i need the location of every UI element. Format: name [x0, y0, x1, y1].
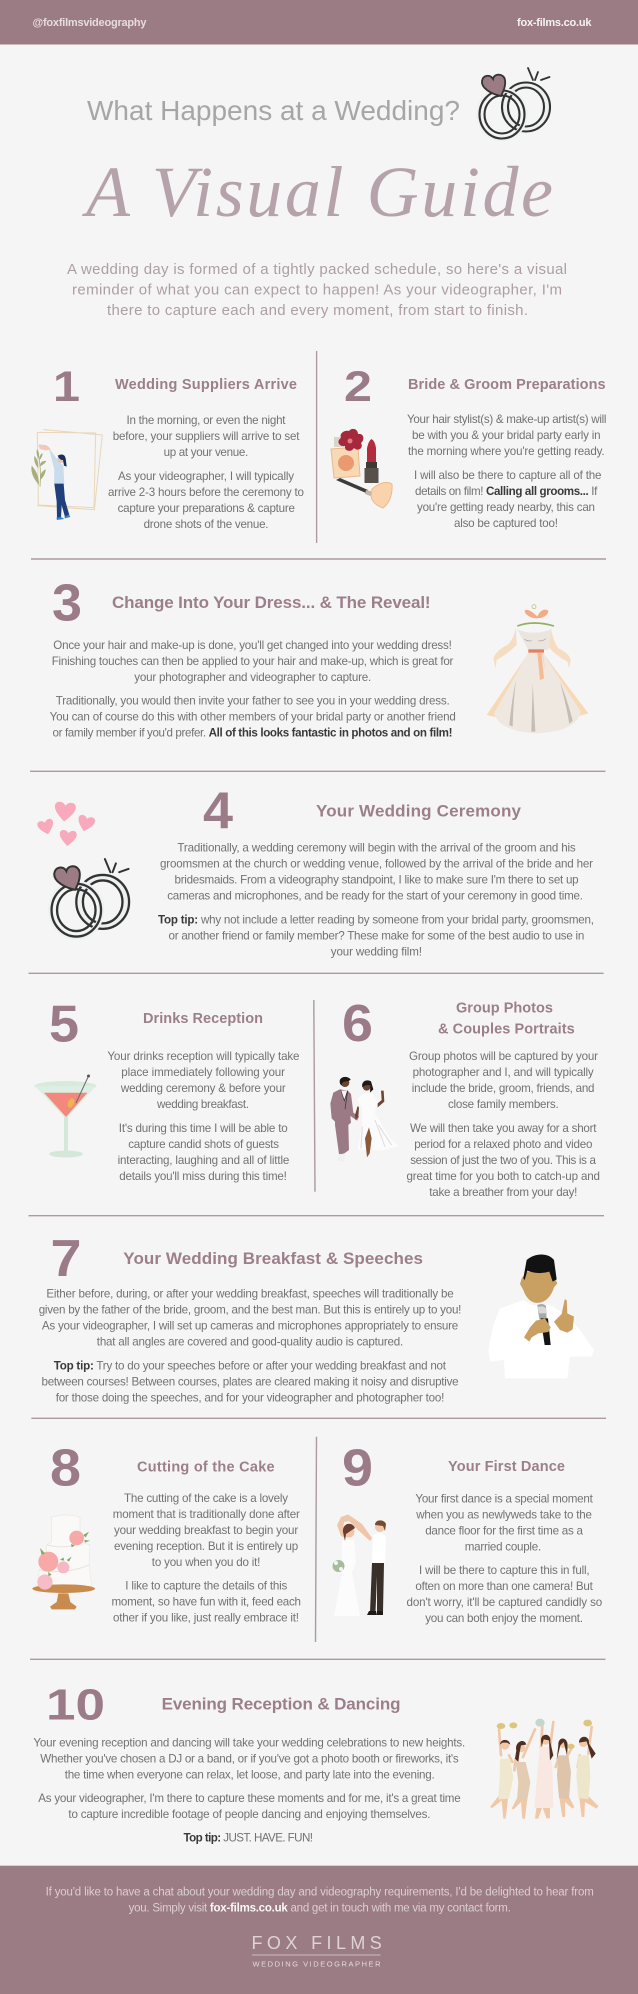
text block: step 5 body: Your drinks reception will typically take	[107, 1050, 300, 1063]
panel: step 3	[50, 574, 588, 740]
heading: Drinks Reception: Drinks Reception	[143, 1011, 263, 1027]
text block: step 9 body: Your first dance is a special moment	[415, 1492, 594, 1505]
text block: step 3 body: your photographer and videographer to capture.	[134, 671, 371, 684]
text block: step 1 body: up at your venue.	[164, 446, 248, 459]
text block: step 9 body: dance floor for the first time as a	[425, 1524, 584, 1537]
text block: step 8 body: other if you like, just really embrace it!	[113, 1612, 299, 1625]
icon: dancing bridesmaids	[490, 1719, 598, 1819]
text block: step 3 body: Finishing touches can then be applied to your hair and make-up, which is great for	[52, 655, 454, 668]
text block: step 8 body: to you when you do it!	[152, 1556, 260, 1569]
text block: step 3 body: Traditionally, you would then invite your father to see you in your wedding dress.	[56, 695, 450, 708]
heading: Cutting of the Cake: Cutting of the Cake	[137, 1460, 275, 1476]
text block: step 10 body: Your evening reception and dancing will take your wedding celebrations to new heights.	[33, 1736, 465, 1749]
text block: step 7 body: Top tip: Try to do your speeches before or after your wedding breakfast and not	[54, 1359, 447, 1372]
text block: step 9 body	[406, 1492, 602, 1625]
text block: step 5 body: details you'll miss during this time!	[119, 1170, 287, 1183]
text block: step 5 body: capture candid shots of guests	[128, 1138, 279, 1151]
text block: step 6 body: We will then take you away for a short	[410, 1122, 597, 1135]
text block: step 1 body: drone shots of the venue.	[144, 518, 268, 531]
text block: step 2 body: be with you & your bridal party early in	[412, 429, 601, 442]
text block: step 5 body	[107, 1050, 300, 1183]
heading: Evening Reception & Dancing: Evening Reception & Dancing	[162, 1694, 400, 1713]
number 10: 10	[46, 1680, 105, 1729]
text block: step 6 body: take a breather from your day!	[429, 1186, 577, 1199]
heading: Group Photos & Couples Portraits: Group Photos	[456, 1001, 553, 1017]
icon: man giving a speech	[488, 1254, 594, 1378]
icon: pink hearts	[37, 801, 96, 847]
text block: step 8 body: The cutting of the cake is a lovely	[124, 1492, 288, 1505]
intro paragraph: reminder of what you can expect to happen! As your videographer, I'm	[72, 282, 562, 299]
text block: step 8 body	[112, 1492, 301, 1625]
icon: martini glass	[34, 1074, 96, 1158]
text block: step 8 body: your wedding breakfast to begin your	[114, 1524, 298, 1537]
divider: steps 5 and 6	[314, 1000, 315, 1192]
text block: step 4 body: or another friend or family member? These make for some of the best audio to use in	[168, 929, 584, 942]
text block: step 2 body: I will also be there to capture all of the	[414, 469, 602, 482]
text block: step 9 body: you can both enjoy the moment.	[425, 1612, 583, 1625]
number 7: 7	[50, 1230, 82, 1288]
panel: step 6	[330, 995, 600, 1199]
icon: wedding rings	[479, 68, 550, 139]
heading: Bride & Groom Preparations: Bride & Groom Preparations	[408, 377, 606, 393]
text block: step 4 body: your wedding film!	[331, 945, 422, 958]
text block: step 6 body: Group photos will be captured by your	[409, 1050, 598, 1063]
number 1: 1	[53, 363, 80, 411]
text block: step 2 body: the morning where you're getting ready.	[408, 445, 605, 458]
number 8: 8	[50, 1440, 81, 1498]
text block: step 7 body: between courses! Between courses, plates are cleared making it noisy and disruptive	[42, 1375, 459, 1388]
text block: step 6 body: period for a relaxed photo and video	[414, 1138, 592, 1151]
text block: step 10 body: the time when everyone can relax, let loose, and party late into the evening.	[65, 1768, 435, 1781]
title: What Happens at a Wedding?: What Happens at a Wedding?	[87, 95, 460, 126]
number 2: 2	[344, 363, 372, 411]
heading: Group Photos & Couples Portraits: & Couples Portraits	[438, 1021, 575, 1037]
number 5: 5	[49, 996, 79, 1054]
text block: step 8 body: moment that is traditionally done after	[113, 1508, 300, 1521]
panel: step 7	[39, 1230, 594, 1404]
text block: step 3 body	[50, 639, 456, 740]
intro paragraph: A wedding day is formed of a tightly packed schedule, so here's a visual	[67, 261, 567, 278]
text block: step 5 body: interacting, laughing and all of little	[118, 1154, 289, 1167]
text block: step 1 body: arrive 2-3 hours before the ceremony to	[108, 486, 304, 499]
text block: step 5 body: wedding breakfast.	[156, 1098, 249, 1111]
text block: step 4 body: cameras and microphones, and be ready for the start of your ceremony in good time.	[167, 890, 583, 903]
text block: step 3 body: You can of course do this with other members of your bridal party or another friend	[50, 711, 456, 724]
text block: step 2 body	[407, 413, 606, 530]
text block: step 6 body: close family members.	[448, 1098, 559, 1111]
icon: make-up set	[331, 429, 392, 508]
header bar: @foxfilmsvideography	[32, 17, 147, 29]
text block: step 1 body: As your videographer, I will typically	[118, 470, 294, 483]
text block: step 6 body: include the bride, groom, friends, and	[412, 1082, 594, 1095]
text block: step 6 body	[406, 1050, 600, 1199]
number 9: 9	[342, 1440, 373, 1498]
text block: step 3 body: or family member if you'd prefer. All of this looks fantastic in photos and on film!	[52, 727, 452, 740]
text block: step 9 body: when you as newlyweds take to the	[415, 1508, 592, 1521]
icon: wedding cake	[32, 1515, 95, 1609]
text block: step 7 body: As your videographer, I will set up cameras and microphones appropriately to ensure	[42, 1320, 458, 1333]
text block: step 2 body: Your hair stylist(s) & make-up artist(s) will	[407, 413, 606, 426]
text block: step 8 body: moment, so have fun with it, feed each	[112, 1596, 301, 1609]
icon: woman hanging a frame	[31, 430, 102, 520]
logo: Fox Films: FOX FILMS	[252, 1933, 382, 1953]
text block: step 7 body: for those doing the speeches, and for your videographer and photographer too!	[56, 1391, 444, 1404]
intro paragraph	[67, 261, 567, 319]
panel: step 4	[37, 783, 594, 958]
text block: step 7 body: Either before, during, or after your wedding breakfast, speeches will traditionally be	[46, 1288, 454, 1301]
icon: bride and groom walking	[330, 1077, 399, 1162]
heading: Your Wedding Breakfast & Speeches: Your Wedding Breakfast & Speeches	[123, 1249, 423, 1268]
footer text: If you'd like to have a chat about your wedding day and videography requirements, I'd be delighted to hear from	[46, 1886, 594, 1898]
text block: step 10 body: to capture incredible footage of people dancing and enjoying themselves.	[68, 1808, 431, 1821]
divider: steps 8 and 9	[316, 1437, 317, 1642]
icon: first dance couple	[332, 1514, 386, 1616]
text block: step 7 body: given by the father of the bride, groom, and the best man. But this is entirely up to you!	[39, 1304, 461, 1317]
panel: step 9	[332, 1440, 602, 1625]
text block: step 6 body: great time for you both to catch-up and	[406, 1170, 600, 1183]
panel: step 2	[331, 363, 606, 530]
heading: Your Wedding Ceremony: Your Wedding Ceremony	[316, 802, 522, 821]
text block: step 3 body: Once your hair and make-up is done, you'll get changed into your wedding dress!	[53, 639, 452, 652]
number 6: 6	[342, 995, 373, 1053]
icon: wedding dress on hanger	[487, 605, 588, 733]
text block: step 9 body: married couple.	[465, 1540, 541, 1553]
text block: step 9 body: don't worry, it'll be captured candidly so	[406, 1596, 602, 1609]
header bar: fox-films.co.uk	[517, 17, 592, 29]
text block: step 4 body: Top tip: why not include a letter reading by someone from your bridal party, groomsmen,	[158, 913, 594, 926]
number 3: 3	[52, 574, 82, 632]
panel: step 1	[31, 363, 304, 531]
text block: step 10 body: As your videographer, I'm there to capture these moments and for me, it's a great time	[38, 1792, 461, 1805]
icon: wedding rings	[51, 859, 129, 937]
footer text	[46, 1886, 594, 1914]
text block: step 4 body: groomsmen at the church or wedding venue, followed by the arrival of the bride and her	[160, 858, 593, 871]
text block: step 6 body: photographer and I, and will typically	[413, 1066, 594, 1079]
text block: step 4 body: bridesmaids. From a videography standpoint, I like to make sure I'm there to set up	[174, 874, 579, 887]
text block: step 4 body	[158, 842, 594, 958]
footer text: you. Simply visit fox-films.co.uk and get in touch with me via my contact form.	[129, 1902, 511, 1914]
panel: step 8	[32, 1440, 301, 1625]
text block: step 1 body	[108, 414, 304, 531]
panel: step 5	[34, 996, 300, 1183]
text block: step 10 body: Top tip: JUST. HAVE. FUN!	[184, 1832, 313, 1845]
text block: step 5 body: It's during this time I will be able to	[119, 1122, 288, 1135]
logo: Fox Films: WEDDING VIDEOGRAPHER	[252, 1960, 381, 1969]
divider: steps 1 and 2	[316, 351, 318, 543]
text block: step 2 body: details on film! Calling all grooms... If	[415, 485, 598, 498]
text block: step 8 body: I like to capture the details of this	[125, 1580, 288, 1593]
footer panel	[0, 1866, 638, 1994]
text block: step 10 body	[33, 1736, 465, 1845]
text block: step 7 body: that all angles are covered and good-quality audio is captured.	[97, 1336, 403, 1349]
header bar	[0, 0, 638, 44]
text block: step 1 body: In the morning, or even the night	[126, 414, 286, 427]
text block: step 1 body: before, your suppliers will arrive to set	[113, 430, 300, 443]
heading: Group Photos & Couples Portraits	[438, 1001, 575, 1037]
text block: step 5 body: place immediately following your	[121, 1066, 285, 1079]
script heading: A Visual Guide: A Visual Guide	[82, 152, 553, 232]
intro paragraph: there to capture each and every moment, from start to finish.	[107, 302, 528, 319]
text block: step 2 body: you're getting ready nearby, this can	[417, 501, 595, 514]
text block: step 2 body: also be captured too!	[454, 517, 558, 530]
text block: step 5 body: wedding ceremony & before your	[120, 1082, 286, 1095]
heading: Wedding Suppliers Arrive: Wedding Suppliers Arrive	[115, 377, 297, 393]
panel: step 10	[33, 1680, 598, 1845]
text block: step 4 body: Traditionally, a wedding ceremony will begin with the arrival of the groom and his	[177, 842, 576, 855]
text block: step 8 body: evening reception. But it is entirely up	[114, 1540, 298, 1553]
text block: step 9 body: often on more than one camera! But	[415, 1580, 594, 1593]
heading: Change Into Your Dress: Change Into Your Dress... & The Reveal!	[112, 593, 431, 612]
text block: step 10 body: Whether you've chosen a DJ or a band, or if you've got a photo booth or fireworks, it's	[40, 1752, 459, 1765]
text block: step 9 body: I will be there to capture this in full,	[419, 1564, 590, 1577]
text block: step 7 body	[39, 1288, 461, 1404]
text block: step 1 body: capture your preparations & capture	[118, 502, 295, 515]
heading: Your First Dance: Your First Dance	[448, 1459, 565, 1475]
logo: Fox Films	[252, 1933, 382, 1969]
text block: step 6 body: session of just the two of you. This is a	[410, 1154, 597, 1167]
number 4: 4	[203, 783, 233, 841]
